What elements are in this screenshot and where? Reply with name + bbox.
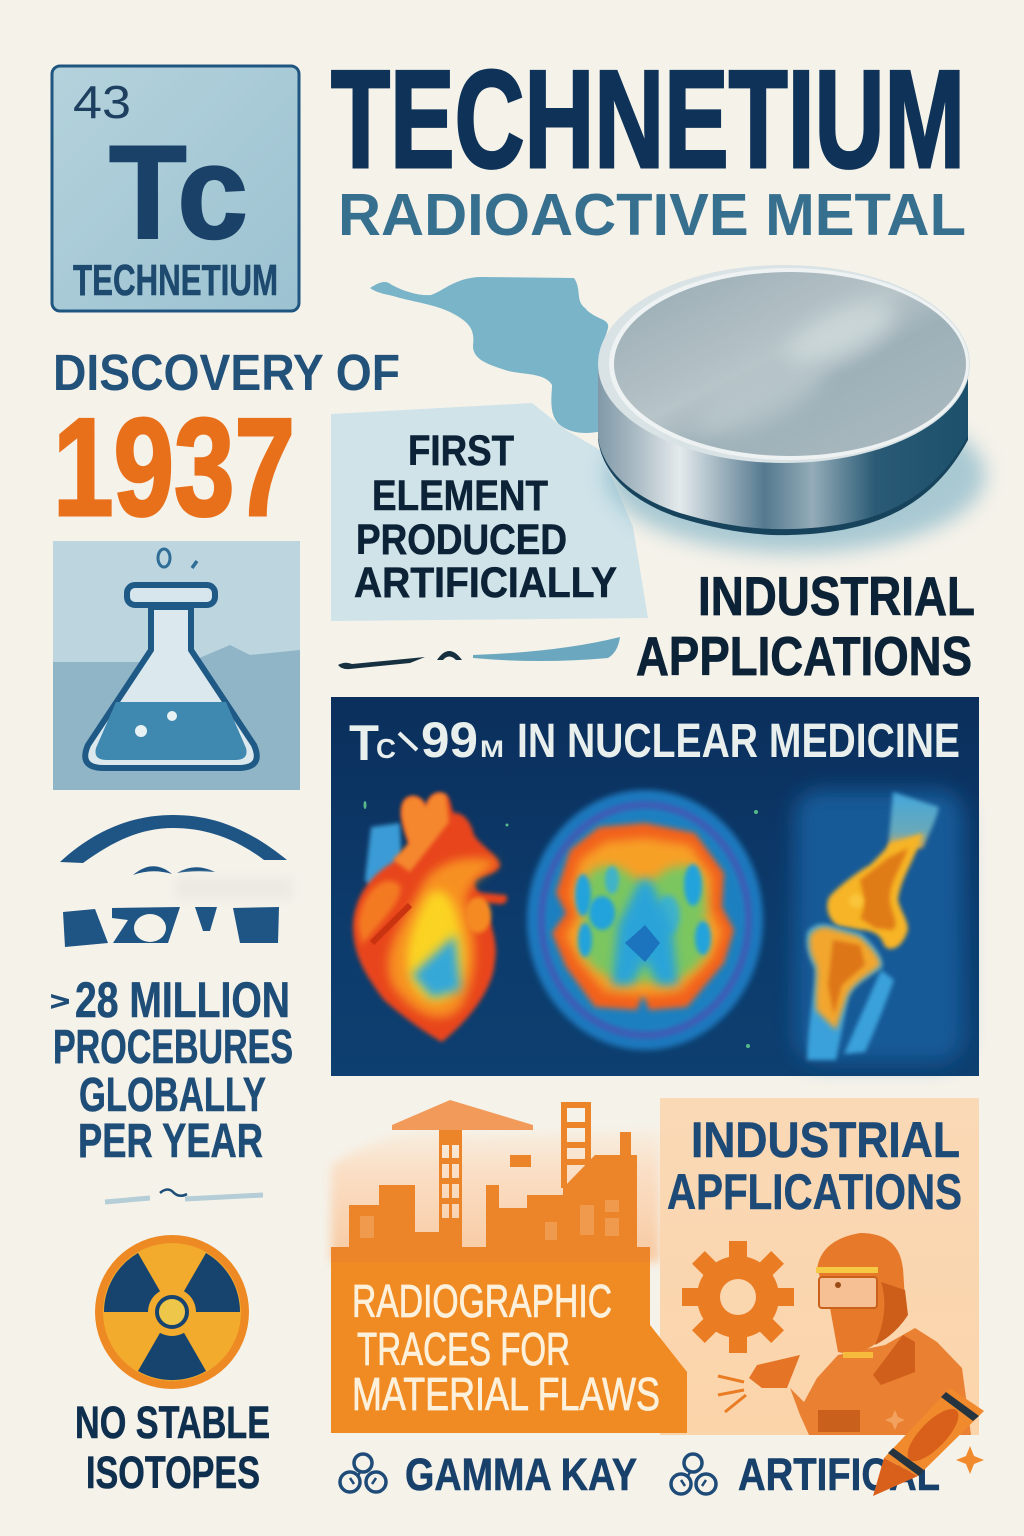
panel: radiographic traces: RADIOGRAPHIC [352,1275,612,1327]
icon: crane and factory skyline [331,1100,650,1265]
stat: procedures [50,972,293,1168]
heading: industrial applications: INDUSTRIAL [691,1112,960,1168]
icon: swirl [671,1454,716,1494]
periodic table tile: 43 [73,76,131,128]
specks [364,801,943,1048]
heading: industrial applications [667,1112,962,1220]
stat: procedures: PER YEAR [78,1115,263,1168]
icon: heart scan [353,793,507,1042]
stat: procedures: GLOBALLY [79,1069,266,1122]
icon: radiation symbol [95,1235,249,1389]
panel heading: T [349,715,379,771]
icon: arc and fragments [60,815,293,947]
icon: metal disk [598,265,985,553]
icon: brain scan [527,790,763,1050]
heading: industrial applications: INDUSTRIAL [698,565,975,627]
legend: gamma ray: GAMMA KAY [405,1449,637,1500]
icon: sparkle on panel [885,1410,905,1430]
panel: radiographic traces [331,1262,687,1433]
icon: sparkle [956,1446,984,1474]
panel: Tc-99m nuclear medicine [331,697,979,1076]
stat: procedures: PROCEBURES [53,1021,293,1074]
icon: gear [682,1241,794,1353]
icon: welder worker [718,1233,971,1435]
panel: first element: FIRST [408,427,514,475]
periodic table tile: TECHNETIUM [73,256,278,305]
icon: bone scan [795,790,963,1062]
stat: procedures: 28 MILLION [75,972,290,1028]
panel: first element [331,403,648,621]
panel: first element: PRODUCED [356,516,567,564]
panel: first element: ARTIFICIALLY [354,559,617,607]
panel: radiographic traces: TRACES FOR [357,1323,570,1375]
heading: industrial applications [636,565,975,687]
text: no stable isotopes: ISOTOPES [86,1447,260,1498]
flask panel [53,541,300,790]
subtitle: RADIOACTIVE METAL [338,182,966,248]
text: no stable isotopes: NO STABLE [75,1397,270,1448]
icon: crayon [873,1388,984,1496]
blue paint blob [370,277,608,433]
panel heading [349,712,960,771]
panel: first element: ELEMENT [372,472,548,520]
text: no stable isotopes [75,1397,270,1498]
panel: industrial scene [331,1098,979,1435]
panel heading: 99 [421,712,478,768]
icon: flask [85,549,257,768]
legend: artificial: ARTIFICAL [738,1449,940,1500]
divider squiggle [105,1190,263,1202]
panel heading: M [480,736,504,763]
legend: artificial [671,1449,940,1500]
small stroke marks [338,637,620,669]
periodic table tile [52,66,299,311]
discovery year: 1937 [53,390,295,545]
panel: radiographic traces: MATERIAL FLAWS [352,1368,660,1420]
stat: procedures: > [50,986,70,1016]
heading: industrial applications: APFLICATIONS [667,1164,962,1220]
discovery heading: DISCOVERY OF [53,344,400,401]
panel heading: C [376,733,396,764]
icon: swirl [340,1454,386,1492]
periodic table tile: Tc [109,119,248,267]
legend: gamma ray [340,1449,637,1500]
